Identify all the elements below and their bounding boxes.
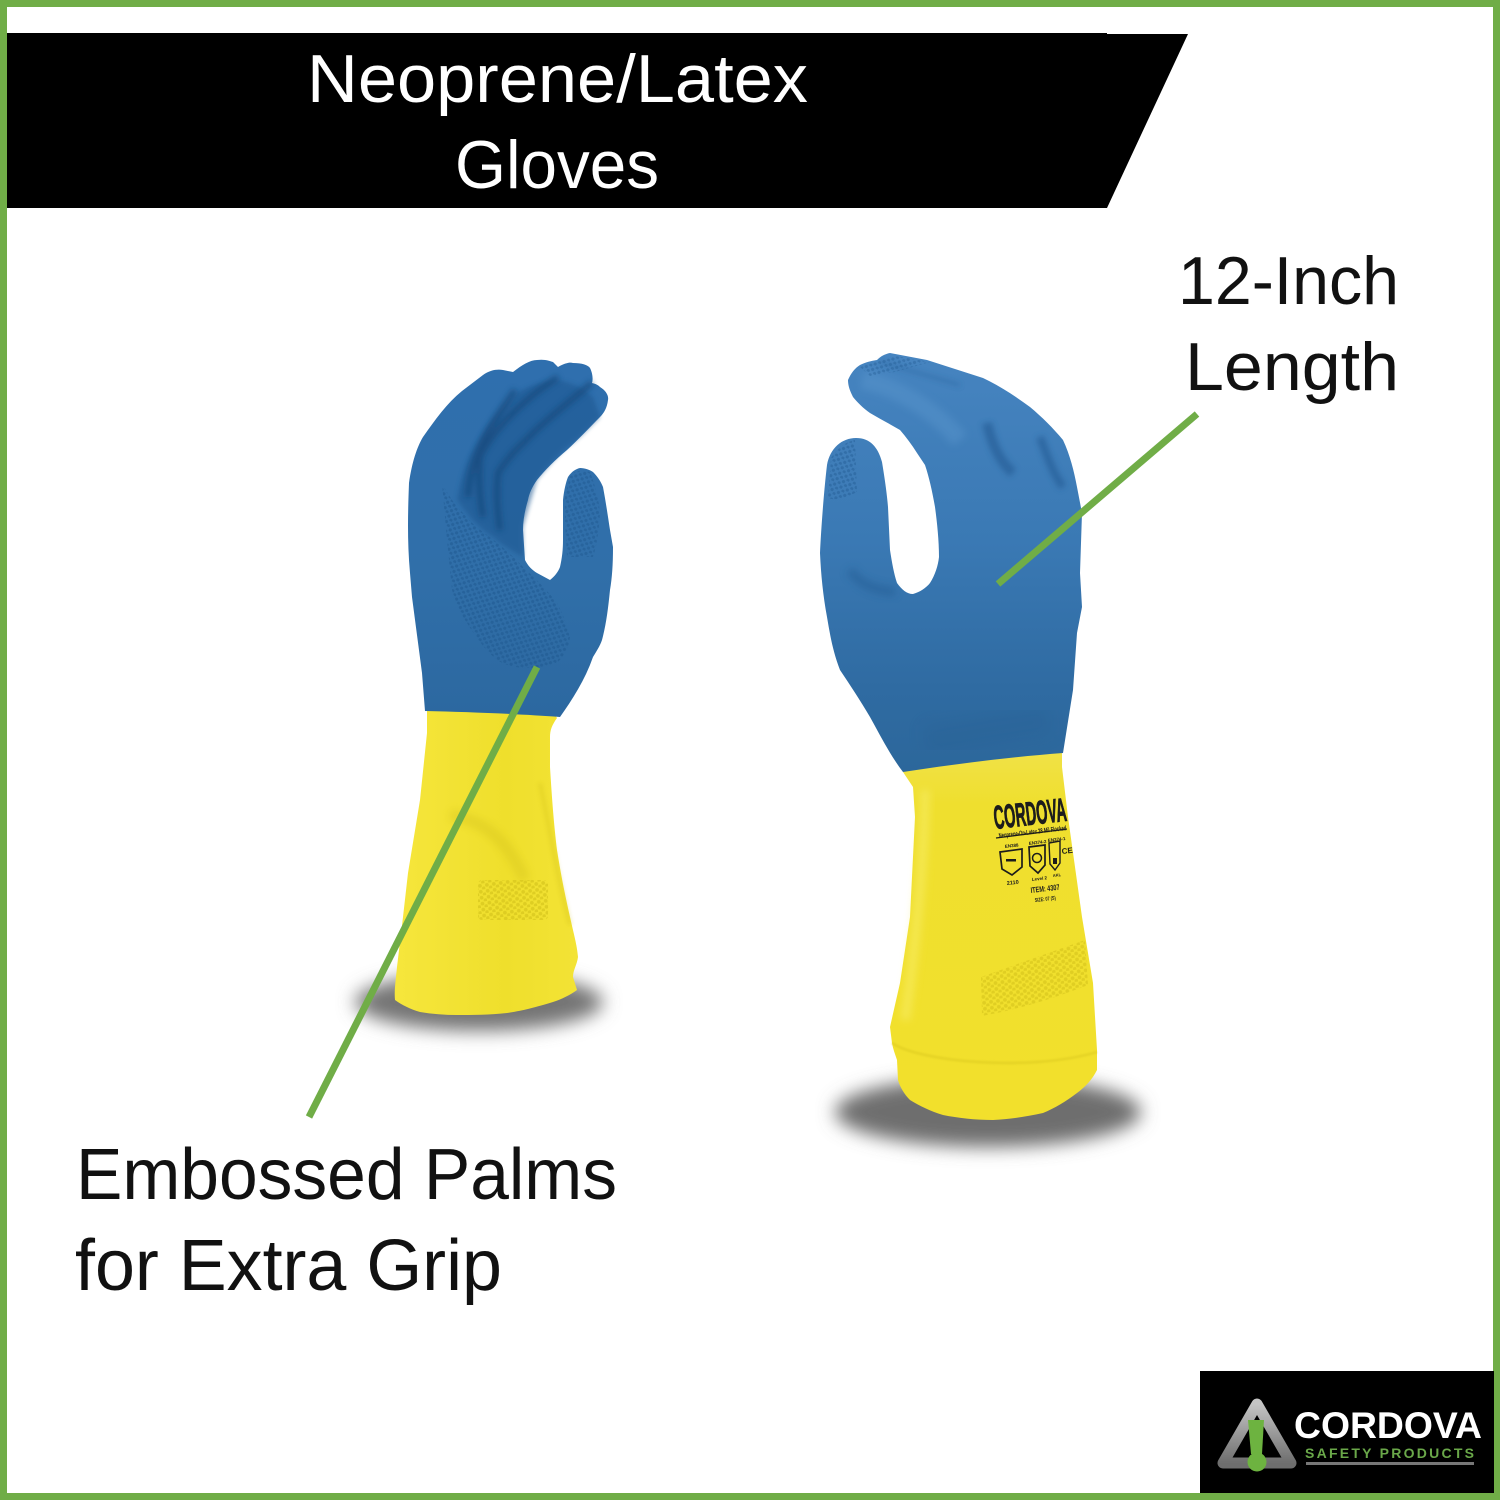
callout line: embossed palms: [309, 667, 537, 1117]
thumb embossing: [828, 440, 857, 499]
icon: warning triangle: [1223, 1404, 1291, 1472]
logo wordmark: CORDOVA: [1294, 1405, 1482, 1446]
callout text: 12-inch length: [1178, 243, 1399, 405]
icon: mechanical hazard shield: [1000, 849, 1022, 875]
finger tip embossing: [860, 356, 930, 376]
blue hand: [408, 360, 613, 717]
glove print label: [992, 791, 1074, 904]
callout text: embossed palms: [75, 1135, 617, 1306]
glove print label: EN374-1: [1048, 836, 1066, 843]
finger shadows: [457, 380, 600, 557]
thumb fold shadow: [850, 570, 895, 592]
glove print label: CE: [1061, 846, 1074, 856]
glove print label: AKL: [1053, 872, 1062, 878]
right glove: back view: [820, 353, 1141, 1147]
callout text: embossed palms: for Extra Grip: [75, 1226, 502, 1306]
shadow: [355, 973, 603, 1031]
palm lower shading: [925, 720, 1050, 740]
cuff hem: [892, 1043, 1097, 1063]
glove print label: EN374-2: [1029, 839, 1047, 846]
title text: [307, 41, 808, 203]
icon: biohazard shield: [1029, 845, 1045, 873]
finger highlight: [862, 380, 960, 440]
cuff embossing: [981, 940, 1088, 1016]
cuff folds: [450, 783, 570, 925]
shadow: [835, 1077, 1141, 1147]
embossed palm pattern: [442, 483, 570, 668]
glove print label: EN388: [1005, 842, 1019, 849]
yellow cuff: [395, 695, 578, 1015]
icon: chemical shield: [1049, 841, 1060, 870]
Cordova logo: [1200, 1371, 1494, 1493]
cuff embossing: [478, 880, 548, 920]
title text: Gloves: [455, 127, 659, 203]
glove print label: 2110: [1007, 880, 1019, 887]
glove print label: ITEM: 4307: [1030, 883, 1060, 895]
title banner: [7, 33, 1188, 208]
right glove: back view: CORDOVA: [992, 791, 1068, 836]
callout line: 12-inch length: [998, 414, 1197, 584]
logo tagline: SAFETY PRODUCTS: [1305, 1445, 1474, 1461]
cuff light fold: [905, 790, 925, 1020]
blue hand: [820, 353, 1082, 772]
title text: Neoprene/Latex: [307, 41, 808, 117]
yellow cuff: [890, 725, 1097, 1120]
callout text: 12-inch length: 12-Inch: [1178, 243, 1399, 319]
finger creases: [468, 377, 592, 530]
glove print label: SIZE: 07 (S): [1035, 896, 1056, 904]
thumb embossing: [565, 471, 600, 557]
finger clefts: [880, 362, 1063, 487]
glove print label: Neoprene-On-Latex 28 Mil Flocked: [998, 825, 1067, 840]
left glove: palm view: [355, 360, 613, 1031]
callout text: 12-inch length: Length: [1185, 329, 1399, 405]
glove print label: Level 2: [1032, 875, 1048, 882]
callout text: embossed palms: Embossed Palms: [76, 1135, 617, 1215]
